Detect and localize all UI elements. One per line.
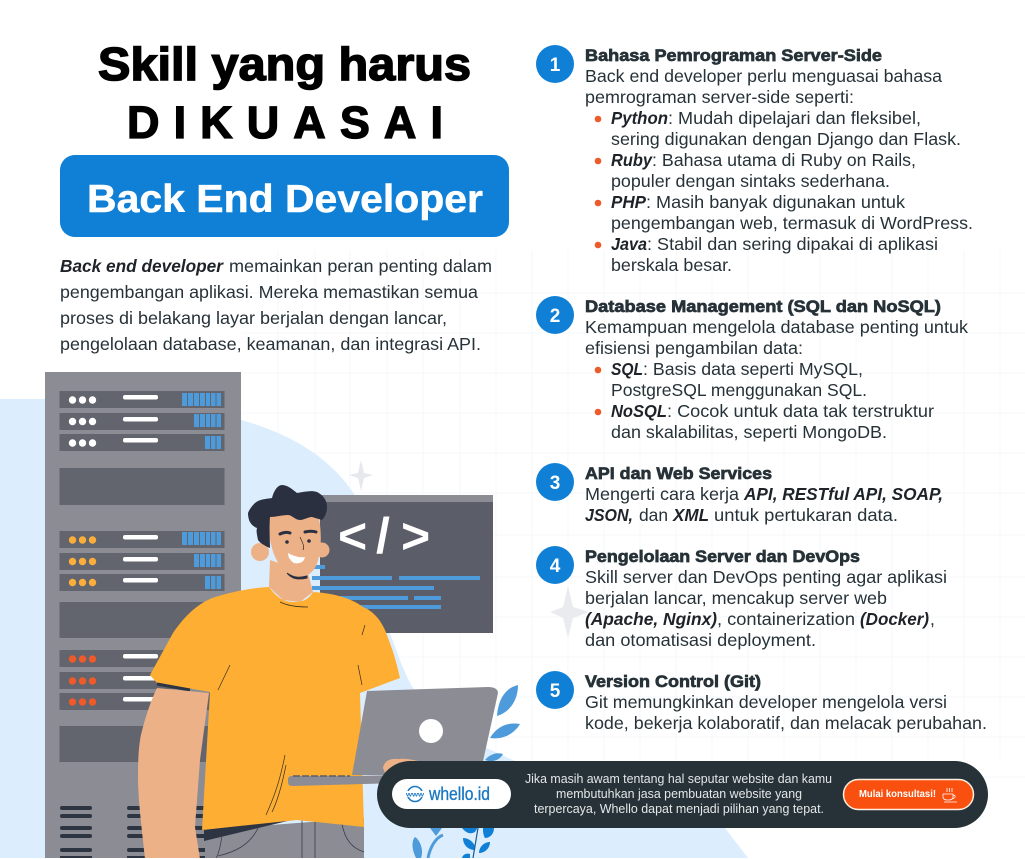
section 2: database management: Database Management (SQL dan NoSQL): [585, 297, 941, 316]
section 1: server-side languages: Python: [611, 108, 668, 128]
section 4: server management and DevOps: dan otomatisasi deployment.: [585, 630, 816, 650]
section 4: server management and DevOps: Skill server dan DevOps penting agar aplikasi: [585, 567, 947, 587]
section 5: version control: [536, 671, 987, 733]
intro text: Back end developer: [60, 256, 224, 276]
illustration: leaves behind laptop: [412, 685, 520, 858]
section 1: server-side languages: Java: [611, 234, 647, 254]
section 1: server-side languages: : Mudah dipelajari dan fleksibel,: [668, 108, 921, 128]
section 5: version control: Version Control (Git): [585, 672, 761, 691]
section 3: API and web services: API dan Web Services: [585, 464, 772, 483]
section 4: server management and DevOps: (Apache, Nginx): [585, 609, 717, 629]
section 4: server management and DevOps: berjalan lancar, mencakup server web: [585, 588, 887, 608]
section 3: API and web services: untuk pertukaran data.: [714, 505, 898, 525]
intro text: pengembangan aplikasi. Mereka memastikan semua: [60, 282, 478, 302]
section 2: database management: : Basis data seperti MySQL,: [643, 359, 863, 379]
title: DIKUASAI: [127, 97, 443, 148]
footer message: membutuhkan jasa pembuatan website yang: [556, 787, 802, 801]
whello logo pill: [392, 779, 511, 809]
section 2: database management: 2: [550, 306, 560, 327]
section 3: API and web services: Mengerti cara kerja: [585, 484, 739, 504]
section 2: database management: Kemampuan mengelola database penting untuk: [585, 317, 968, 337]
section 4: server management and DevOps: 4: [550, 556, 561, 577]
section 1: server-side languages: pengembangan web, termasuk di WordPress.: [611, 213, 973, 233]
section 3: API and web services: [536, 463, 943, 525]
section 1: server-side languages: berskala besar.: [611, 255, 732, 275]
section 3: API and web services: dan: [639, 505, 668, 525]
section 4: server management and DevOps: ,: [930, 609, 935, 629]
illustration: server rack: [45, 372, 241, 859]
section 1: server-side languages: populer dengan sintaks sederhana.: [611, 171, 890, 191]
section 2: database management: NoSQL: [611, 401, 667, 421]
footer message: [525, 772, 832, 816]
icon: large sparkle: [550, 586, 589, 638]
intro text: pengelolaan database, keamanan, dan integrasi API.: [60, 334, 481, 354]
consult button: Mulai konsultasi!: [859, 788, 936, 800]
intro text: memainkan peran penting dalam: [229, 256, 492, 276]
section 5: version control: 5: [550, 681, 561, 702]
subtitle banner: [60, 155, 509, 237]
section 4: server management and DevOps: [536, 546, 947, 650]
section 2: database management: [536, 296, 968, 442]
section 1: server-side languages: sering digunakan dengan Django dan Flask.: [611, 129, 961, 149]
subtitle banner: Back End Developer: [87, 178, 483, 221]
section 2: database management: : Cocok untuk data tak terstruktur: [667, 401, 934, 421]
footer message: terpercaya, Whello dapat menjadi pilihan yang tepat.: [534, 802, 824, 816]
section 1: server-side languages: Bahasa Pemrograman Server-Side: [585, 46, 882, 65]
section 4: server management and DevOps: , containerization: [717, 609, 855, 629]
illustration: developer: [138, 485, 400, 859]
section 2: database management: dan skalabilitas, seperti MongoDB.: [611, 422, 887, 442]
icon: sparkle: [349, 460, 373, 491]
section 3: API and web services: JSON,: [585, 505, 633, 525]
section 1: server-side languages: Back end developer perlu menguasai bahasa: [585, 66, 942, 86]
illustration: bottom dark leaves: [462, 828, 494, 858]
section 3: API and web services: API, RESTful API, SOAP,: [743, 484, 943, 504]
section 1: server-side languages: : Masih banyak digunakan untuk: [646, 192, 905, 212]
footer message: Jika masih awam tentang hal seputar website dan kamu: [525, 772, 832, 786]
whello logo pill: whello.id: [428, 784, 490, 804]
intro text: [60, 256, 492, 354]
section 1: server-side languages: 1: [550, 55, 561, 76]
section 3: API and web services: XML: [672, 505, 709, 525]
title: Skill yang harus: [98, 38, 471, 90]
section 4: server management and DevOps: Pengelolaan Server dan DevOps: [585, 547, 860, 566]
whello logo pill: www: [405, 792, 425, 798]
section 3: API and web services: 3: [550, 473, 560, 494]
background: light blue shape: [0, 399, 748, 858]
section 5: version control: Git memungkinkan developer mengelola versi: [585, 692, 947, 712]
section 2: database management: PostgreSQL menggunakan SQL.: [611, 380, 867, 400]
consult button: [844, 780, 974, 810]
section 1: server-side languages: : Bahasa utama di Ruby on Rails,: [652, 150, 916, 170]
section 1: server-side languages: pemrograman server-side seperti:: [585, 87, 854, 107]
footer banner: [377, 761, 988, 828]
section 5: version control: kode, bekerja kolaboratif, dan melacak perubahan.: [585, 713, 987, 733]
section 4: server management and DevOps: (Docker): [860, 609, 929, 629]
section 1: server-side languages: : Stabil dan sering dipakai di aplikasi: [647, 234, 938, 254]
section 1: server-side languages: PHP: [611, 192, 646, 212]
section 1: server-side languages: Ruby: [611, 150, 653, 170]
illustration: laptop: [288, 687, 498, 786]
section 1: server-side languages: [536, 45, 973, 275]
intro text: proses di belakang layar berjalan dengan lancar,: [60, 308, 447, 328]
section 2: database management: SQL: [611, 359, 643, 379]
section 2: database management: efisiensi pengambilan data:: [585, 338, 803, 358]
illustration: code monitor: </>: [338, 508, 430, 564]
illustration: code monitor: [312, 495, 493, 633]
title: [98, 38, 471, 148]
